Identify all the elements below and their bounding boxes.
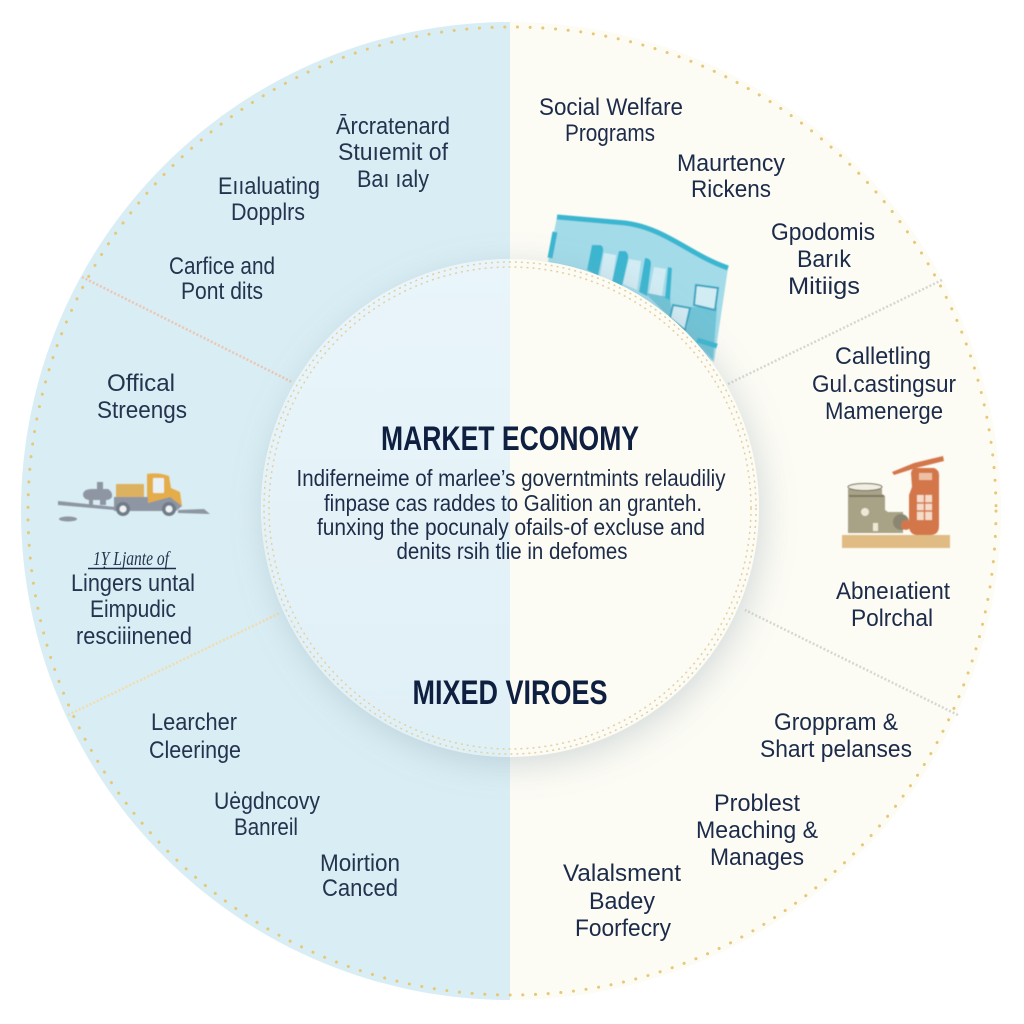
labels: lower right: Groppram & — [774, 709, 898, 736]
labels: lower right: Badey — [589, 888, 655, 915]
label: underlined heading — [71, 548, 195, 650]
labels: upper right: Maurtency — [677, 150, 785, 177]
labels: upper right: Rickens — [691, 176, 771, 203]
central description: Indiferneime of marlee’s governtmints relaudiliy — [296, 465, 726, 491]
labels: right middle: Mamenerge — [825, 398, 943, 425]
labels: right middle: Gul.castingsur — [812, 371, 956, 398]
labels: lower right: Foorfecry — [575, 915, 671, 942]
labels: left side: Baı ıaly — [357, 166, 429, 193]
labels: lower right: Valalsment — [563, 860, 681, 887]
labels: upper right: Programs — [565, 120, 655, 147]
labels: right middle — [812, 343, 956, 632]
labels: left side: Pont dits — [181, 278, 263, 305]
labels: lower left — [149, 709, 400, 902]
labels: lower left: Cleeringe — [149, 737, 241, 764]
divider lines — [68, 277, 958, 715]
central description: denits rsih tlie in defomes — [396, 538, 628, 564]
labels: upper right: Gpodomis — [771, 219, 875, 246]
labels: left side: Ārcratenard — [336, 113, 450, 140]
labels: left side: Carfice and — [169, 253, 275, 280]
labels: left side: Streengs — [97, 397, 187, 424]
icon: truck — [58, 473, 210, 522]
central description: funxing the pocunaly ofails-of excluse and — [317, 514, 705, 540]
labels: lower left: Learcher — [151, 709, 237, 736]
labels: lower right: Meaching & — [696, 817, 818, 844]
labels: upper right: Mitiigs — [788, 273, 860, 300]
labels: lower right: Problest — [714, 790, 800, 817]
labels: lower right: Manages — [710, 844, 804, 871]
central description — [296, 465, 726, 564]
central description: finpase cas raddes to Galition an granteh. — [324, 490, 702, 516]
label: underlined heading: 1Ỵ Ljante of — [93, 548, 171, 570]
heading: market economy: MARKET ECONOMY — [381, 420, 639, 458]
labels: upper right — [539, 94, 875, 300]
labels: right middle: Calletling — [835, 343, 931, 370]
labels: lower right: Shart pelanses — [760, 736, 912, 763]
labels: upper right: Social Welfare — [539, 94, 683, 121]
labels: left side — [97, 113, 450, 424]
labels: left side: Offical — [107, 370, 175, 397]
label: underlined heading: Eimpudic — [90, 596, 176, 623]
labels: upper right: Barık — [797, 246, 852, 273]
labels: lower left: Banreil — [234, 814, 298, 841]
labels: right middle: Abneıatient — [836, 578, 950, 605]
labels: lower left: Moirtion — [320, 850, 400, 877]
icon: building — [548, 217, 728, 362]
panel: central circle — [261, 259, 759, 757]
labels: lower left: Canced — [322, 875, 398, 902]
labels: right middle: Polrchal — [851, 605, 933, 632]
labels: lower left: Uėgdncovy — [214, 788, 320, 815]
central circle dotted rings — [264, 262, 756, 754]
heading: mixed viroes: MIXED VIROES — [412, 674, 608, 712]
label: underlined heading: resciiinened — [76, 623, 192, 650]
labels: left side: Dopplrs — [231, 199, 305, 226]
icon: machine — [842, 456, 950, 548]
labels: left side: Stuıemit of — [338, 139, 448, 166]
label: underlined heading: Lingers untal — [71, 570, 195, 597]
labels: left side: Eııaluating — [218, 173, 320, 200]
labels: lower right — [563, 709, 912, 942]
